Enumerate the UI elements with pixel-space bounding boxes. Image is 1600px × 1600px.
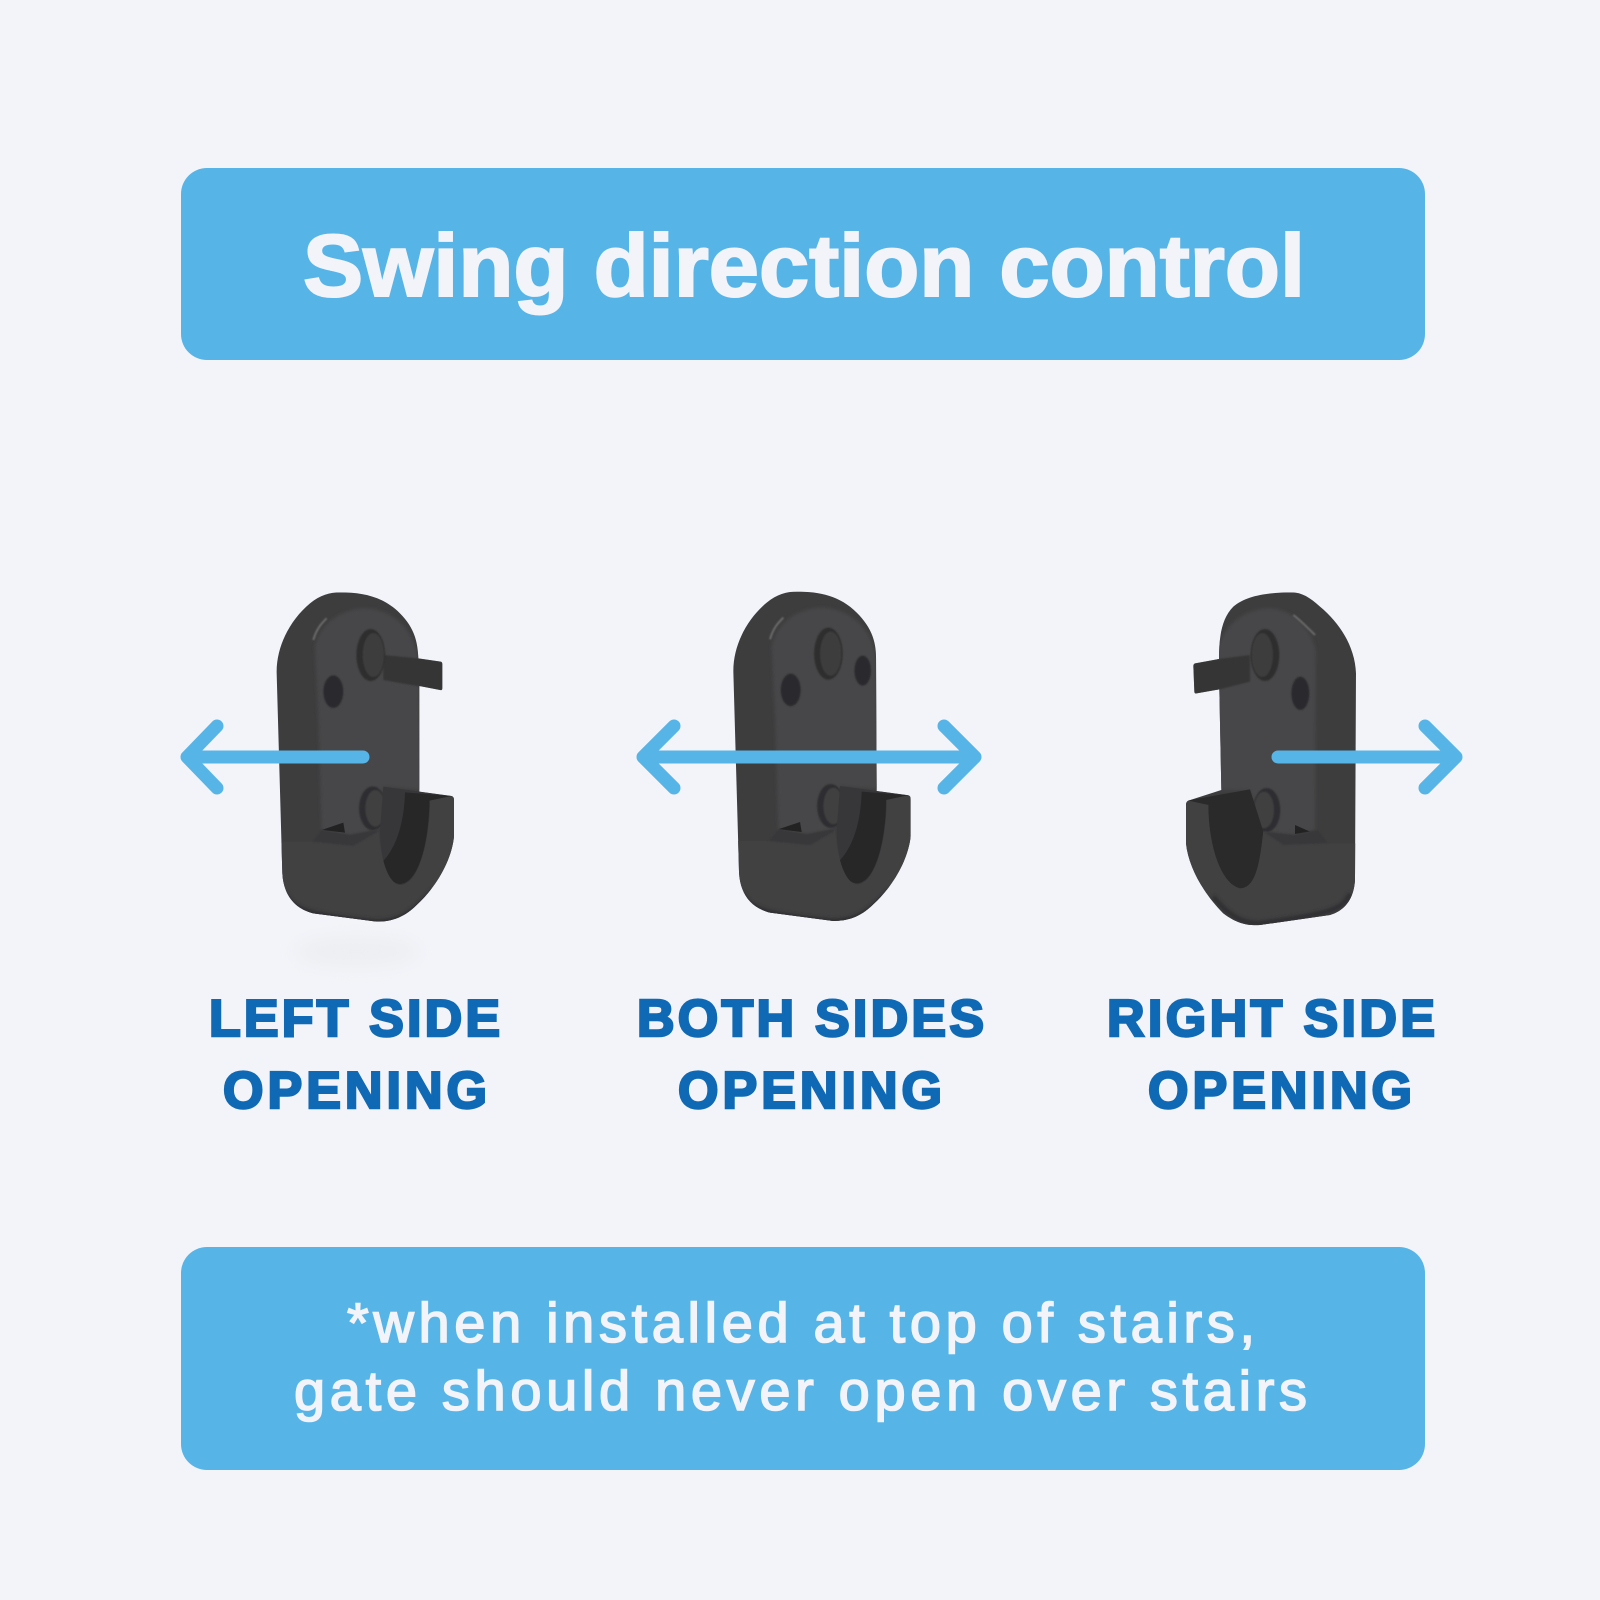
label: left side opening <box>209 990 500 1120</box>
label: left side opening: LEFT SIDE <box>209 990 500 1048</box>
label: right side opening: RIGHT SIDE <box>1107 990 1435 1048</box>
left bracket with arrow <box>180 592 454 922</box>
title banner <box>181 168 1425 360</box>
label: both sides opening: OPENING <box>678 1062 942 1120</box>
right bracket with arrow <box>1180 583 1456 933</box>
label: both sides opening <box>637 990 984 1120</box>
arrow: left <box>187 726 363 788</box>
note banner <box>181 1247 1425 1470</box>
note text <box>294 1291 1307 1422</box>
bracket: both sides <box>733 592 911 921</box>
centre bracket with arrow <box>643 583 975 929</box>
arrow: both directions <box>643 726 975 788</box>
label: left side opening: OPENING <box>223 1062 487 1120</box>
bracket: right side <box>1186 592 1356 926</box>
label: both sides opening: BOTH SIDES <box>637 990 984 1048</box>
label: right side opening: OPENING <box>1148 1062 1412 1120</box>
label: right side opening <box>1107 990 1435 1120</box>
arrow: right <box>1278 726 1456 788</box>
note text: gate should never open over stairs <box>294 1359 1307 1422</box>
bracket: left side <box>276 592 454 922</box>
note text: *when installed at top of stairs, <box>347 1291 1255 1354</box>
title: Swing direction control <box>303 216 1305 315</box>
